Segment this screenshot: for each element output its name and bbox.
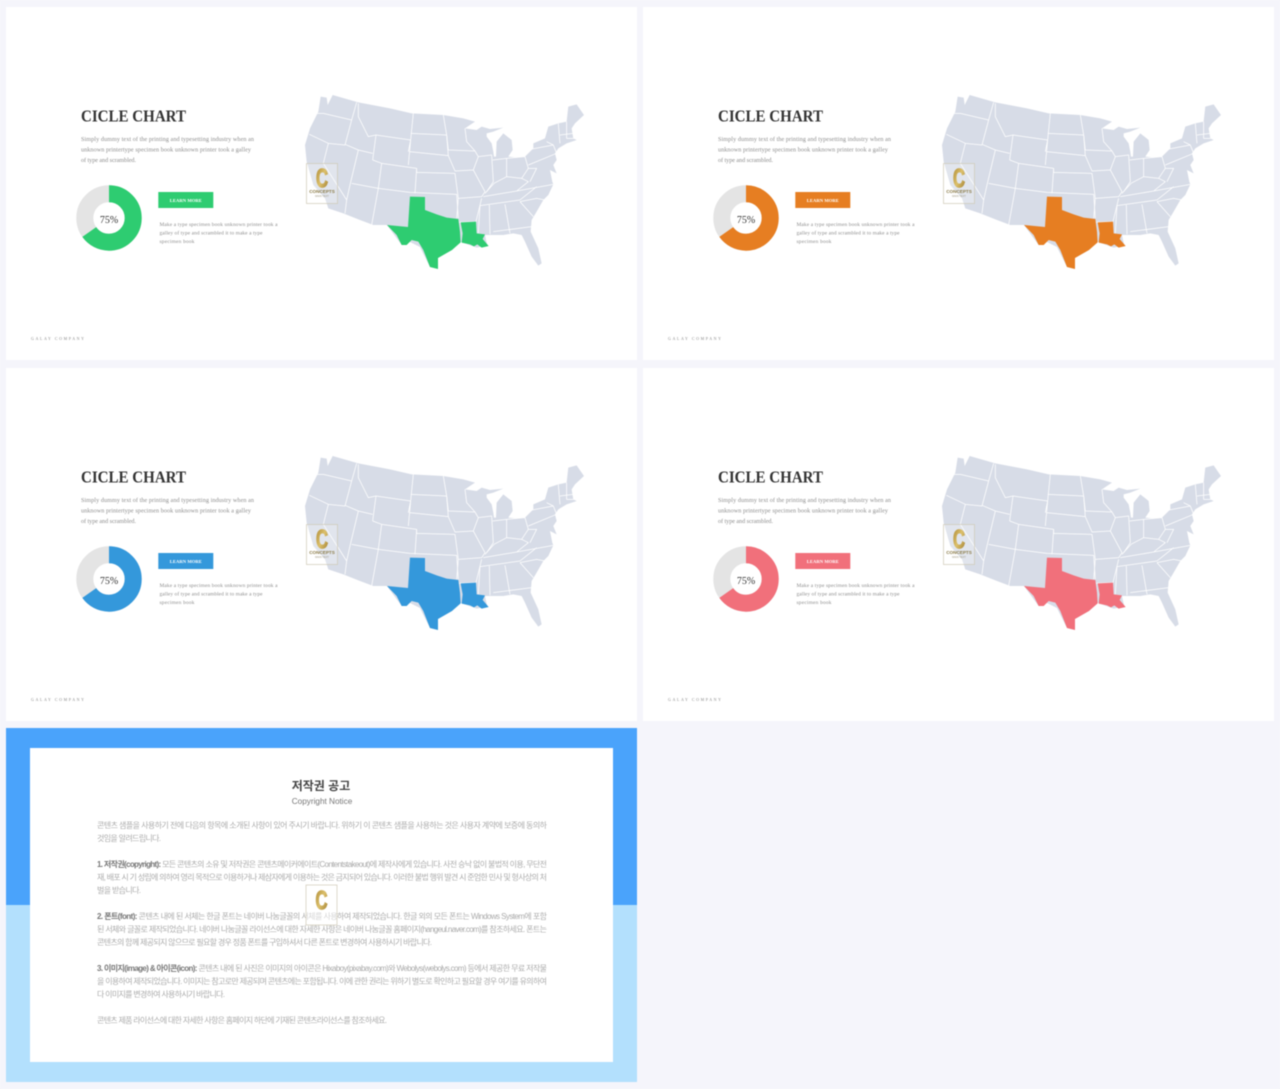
title: CICLE CHART xyxy=(81,106,187,126)
intro text xyxy=(81,497,254,525)
footer: GALAY COMPANY xyxy=(668,336,721,341)
intro text: Simply dummy text of the printing and typesetting industry when an xyxy=(718,497,891,504)
logo watermark xyxy=(306,524,338,564)
section 3: image and icon: 다 이미지를 변경하여 사용하시기 바랍니다. xyxy=(97,989,225,999)
panel: blue slide xyxy=(6,368,637,721)
title: CICLE CHART xyxy=(718,468,824,486)
intro text: unknown printertype specimen book unknown printer took a galley xyxy=(81,146,252,154)
description text: Make a type specimen book unknown printer took a xyxy=(796,222,915,228)
panel: orange slide xyxy=(643,7,1274,360)
panel: green slide xyxy=(6,7,637,360)
intro paragraph: 것임을 알려드립니다. xyxy=(97,833,161,843)
notice subheading: Copyright Notice xyxy=(292,797,353,806)
map xyxy=(305,95,584,269)
footer: GALAY COMPANY xyxy=(31,697,84,702)
description text: galley of type and scrambled it to make a type xyxy=(796,230,900,236)
description text xyxy=(160,583,278,606)
button xyxy=(158,192,213,208)
intro text: of type and scrambled. xyxy=(81,518,136,525)
logo watermark xyxy=(306,163,338,204)
donut chart xyxy=(722,194,770,242)
button: LEARN MORE xyxy=(170,198,202,203)
description text: specimen book xyxy=(160,239,195,245)
logo watermark: CONCEPTS xyxy=(946,189,972,194)
intro text: unknown printertype specimen book unknown printer took a galley xyxy=(718,146,889,154)
map xyxy=(942,456,1221,630)
button: LEARN MORE xyxy=(170,559,202,564)
button xyxy=(795,192,850,208)
intro text: Simply dummy text of the printing and typesetting industry when an xyxy=(718,136,891,143)
description text xyxy=(796,222,915,245)
panel: copyright notice xyxy=(6,728,637,1082)
button xyxy=(158,553,213,569)
button: LEARN MORE xyxy=(807,198,839,203)
logo watermark: MAIN TEXT xyxy=(952,194,966,198)
section 2: font: 된 서체와 글꼴로 제작되었습니다. 네이버 나눔글꼴 라이선스에 대한 자세한 사항은 네이버 나눔글꼴 홈페이지(hangeul.naver.com)를 참조하세요. 폰트는 xyxy=(97,924,547,934)
section 1: copyright xyxy=(97,859,547,895)
intro text xyxy=(81,136,254,164)
logo watermark: C xyxy=(316,885,328,915)
section 2: font: 2. 폰트(font): 콘텐츠 내에 된 서체는 한글 폰트는 네이버 나눔글꼴의 서체를 사용하여 제작되었습니다. 한글 외의 모든 폰트는 Windows System에 포함 xyxy=(97,911,548,921)
intro text: Simply dummy text of the printing and typesetting industry when an xyxy=(81,497,254,504)
donut chart: 75% xyxy=(737,576,755,587)
section 1: copyright: 벌을 받습니다. xyxy=(97,885,141,895)
logo watermark: C xyxy=(316,163,328,193)
description text: specimen book xyxy=(160,600,195,606)
section 2: font xyxy=(97,911,548,947)
donut chart xyxy=(722,555,770,603)
logo watermark: CONCEPTS xyxy=(309,550,335,555)
logo watermark: CONCEPTS xyxy=(309,189,335,194)
description text xyxy=(160,222,278,245)
intro text xyxy=(718,497,891,525)
donut chart xyxy=(85,555,133,603)
description text: specimen book xyxy=(796,600,832,606)
donut chart xyxy=(85,194,133,242)
description text: Make a type specimen book unknown printer took a xyxy=(160,222,278,228)
description text: galley of type and scrambled it to make a type xyxy=(160,230,263,236)
donut chart: 75% xyxy=(100,215,118,226)
map xyxy=(942,95,1221,269)
intro paragraph: 콘텐츠 샘플을 사용하기 전에 다음의 항목에 소개된 사항이 있어 주시기 바랍니다. 위하기 이 콘텐츠 샘플을 사용하는 것은 사용자 계약에 보증에 동의하 xyxy=(97,820,548,830)
section 3: image and icon: 을 이용하여 제작되었습니다. 이미지는 참고로만 제공되며 콘텐츠에는 포함됩니다. 이에 관한 권리는 위하기 별도로 확인하고 필요할 경우 여기를 유의하여 xyxy=(97,976,547,986)
map xyxy=(305,456,584,630)
donut chart: 75% xyxy=(100,576,118,587)
intro text: of type and scrambled. xyxy=(718,157,773,164)
panel: pink slide xyxy=(643,368,1274,721)
title: CICLE CHART xyxy=(718,106,824,126)
logo watermark xyxy=(944,163,974,204)
donut chart: 75% xyxy=(737,215,755,226)
intro text: unknown printertype specimen book unknown printer took a galley xyxy=(718,508,889,514)
description text: galley of type and scrambled it to make a type xyxy=(160,590,263,598)
logo watermark: MAIN TEXT xyxy=(315,194,329,198)
description text: galley of type and scrambled it to make a type xyxy=(796,590,900,598)
description text: Make a type specimen book unknown printer took a xyxy=(160,583,278,589)
logo watermark: C xyxy=(953,524,965,554)
intro text xyxy=(718,136,891,164)
logo watermark: C xyxy=(316,524,328,554)
description text xyxy=(796,583,915,606)
logo watermark: CONCEPTS xyxy=(946,550,972,555)
description text: Make a type specimen book unknown printer took a xyxy=(796,583,915,589)
notice heading: 저작권 공고 xyxy=(292,778,350,793)
section 1: copyright: 1. 저작권(copyright): 모든 콘텐츠의 소유 및 저작권은 콘텐츠메이커에이트(Contentstakeout)에 제작사에게 있습니다. 사전 승낙 없이 불법적 이용, 무단전 xyxy=(97,859,547,869)
footer: GALAY COMPANY xyxy=(668,697,721,702)
intro text: of type and scrambled. xyxy=(718,518,773,525)
footer: GALAY COMPANY xyxy=(31,336,84,341)
logo watermark xyxy=(306,885,337,925)
description text: specimen book xyxy=(796,239,832,245)
logo watermark: MAIN TEXT xyxy=(952,555,966,559)
intro text: of type and scrambled. xyxy=(81,157,136,164)
logo watermark: C xyxy=(953,163,965,193)
section 1: copyright: 재, 배포 시 기 성립에 의하여 영리 목적으로 이용하거나 제삼자에게 이용하는 것은 금지되어 있습니다. 이러한 불법 행위 발견 시 준엄한 민사 및 형사상의 처 xyxy=(97,872,547,882)
title: CICLE CHART xyxy=(81,468,187,486)
logo watermark: MAIN TEXT xyxy=(315,555,329,559)
logo watermark xyxy=(944,524,974,564)
intro text: Simply dummy text of the printing and typesetting industry when an xyxy=(81,136,254,143)
section 3: image and icon: 3. 이미지(image) & 아이콘(icon): 콘텐츠 내에 된 사진은 이미지의 아이콘은 Hixaboy(pixabay.com)와 Webolys(webolys.com) 등에서 제공한 무료 저작물 xyxy=(97,963,547,973)
button: LEARN MORE xyxy=(807,559,839,564)
section 2: font: 콘텐츠의 함께 제공되지 않으므로 필요할 경우 정품 폰트를 구입하셔서 다른 폰트로 변경하여 사용하시기 바랍니다. xyxy=(97,937,432,947)
license note: 콘텐츠 제품 라이선스에 대한 자세한 사항은 홈페이지 하단에 기재된 콘텐츠라이선스를 참조하세요. xyxy=(97,1015,387,1025)
intro paragraph xyxy=(97,820,548,843)
intro text: unknown printertype specimen book unknown printer took a galley xyxy=(81,508,252,514)
section 3: image and icon xyxy=(97,963,547,999)
button xyxy=(795,553,850,569)
